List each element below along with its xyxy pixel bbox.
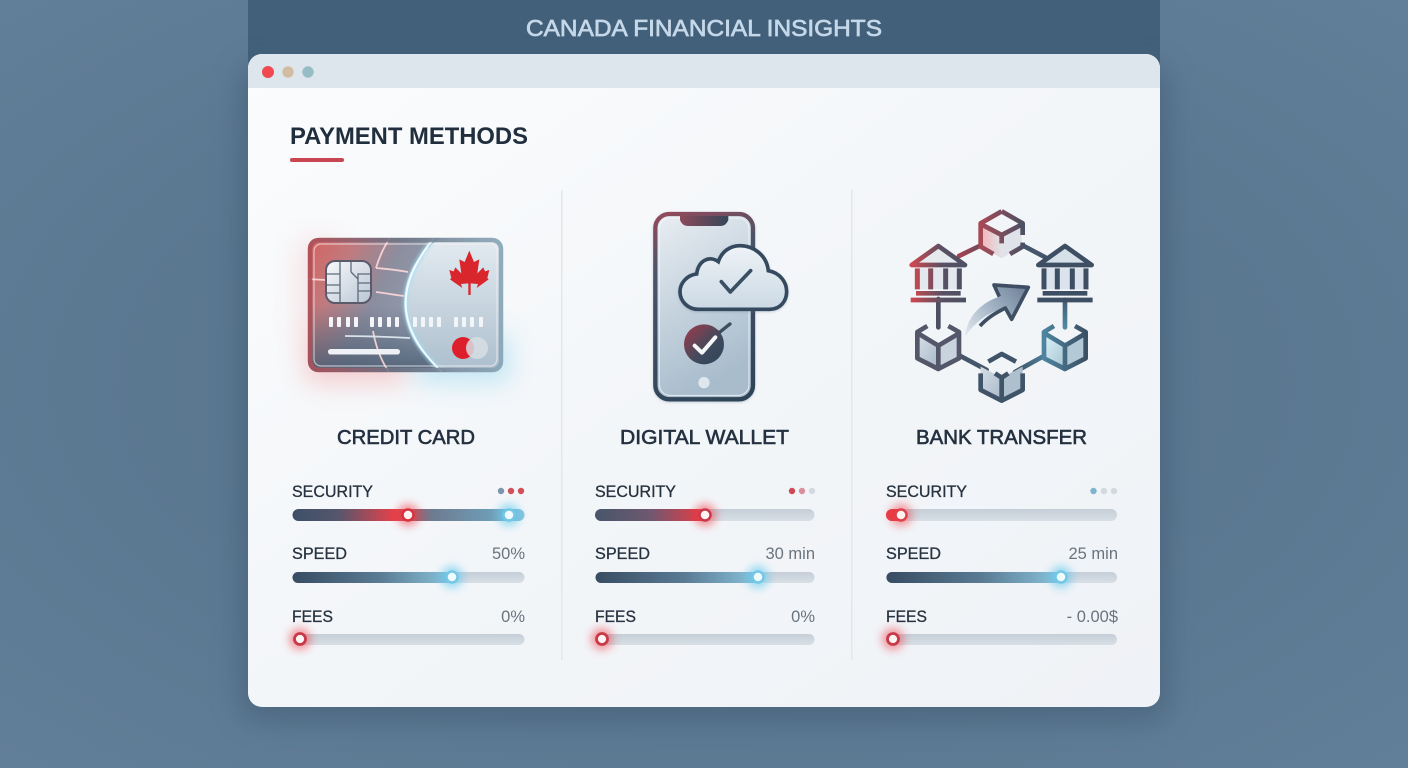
icon: bank network [911, 211, 1093, 401]
metric: fees [882, 607, 1118, 650]
label: bank transfer: BANK TRANSFER [916, 427, 1087, 449]
card number digits [329, 317, 483, 327]
metric: fees [289, 607, 525, 650]
top cube [981, 211, 1023, 258]
metric: fees: FEES [886, 607, 927, 626]
main browser window panel [248, 54, 1160, 707]
card signature strip [328, 349, 400, 354]
column: digital wallet [591, 214, 815, 650]
column: credit card [284, 236, 525, 655]
metric: security: SECURITY [886, 482, 967, 501]
metric: speed [886, 544, 1118, 588]
cloud with check [680, 246, 787, 309]
window control: teal dot [302, 66, 314, 78]
heading underline [290, 158, 344, 162]
window control: red dot [262, 66, 274, 78]
bottom cube [981, 354, 1023, 401]
card chip [326, 261, 371, 303]
metric: security [886, 482, 1117, 526]
section heading: PAYMENT METHODS [290, 123, 528, 150]
icon: credit card [298, 227, 556, 383]
network connectors [938, 242, 1065, 372]
metric: fees: FEES [292, 607, 333, 626]
metric: speed: SPEED [292, 544, 347, 563]
panel shadow [240, 66, 1168, 721]
card network logo [452, 337, 488, 359]
header title: CANADA FINANCIAL INSIGHTS [526, 15, 882, 41]
column: bank transfer [882, 211, 1118, 650]
transfer arrow [965, 285, 1028, 337]
left cube [917, 326, 959, 369]
icon: maple leaf [449, 251, 489, 295]
right cube [1044, 326, 1086, 369]
header bar [248, 0, 1160, 70]
metric: speed [292, 544, 525, 588]
metric: fees: - 0.00$ [1067, 608, 1118, 626]
metric: speed [595, 544, 815, 588]
metric: security [292, 482, 524, 526]
metric: security: SECURITY [595, 482, 676, 501]
window title bar [248, 54, 1160, 88]
label: digital wallet: DIGITAL WALLET [620, 427, 789, 449]
left bank [911, 246, 966, 300]
metric: fees: FEES [595, 607, 636, 626]
metric: speed: 50% [492, 545, 525, 563]
metric: fees: 0% [791, 608, 815, 626]
right bank [1037, 246, 1093, 300]
metric: speed: SPEED [595, 544, 650, 563]
metric: security [595, 482, 815, 526]
metric: speed: 25 min [1068, 545, 1118, 563]
home button [698, 377, 710, 388]
label: credit card: CREDIT CARD [337, 427, 475, 449]
metric: speed: SPEED [886, 544, 941, 563]
metric: security: SECURITY [292, 482, 373, 501]
metric: fees: 0% [501, 608, 525, 626]
metric: fees [591, 607, 815, 650]
metric: speed: 30 min [765, 545, 815, 563]
status badge with check [684, 324, 730, 364]
phone notch [680, 216, 728, 226]
icon: phone with cloud [655, 214, 787, 399]
window control: tan dot [282, 66, 294, 78]
